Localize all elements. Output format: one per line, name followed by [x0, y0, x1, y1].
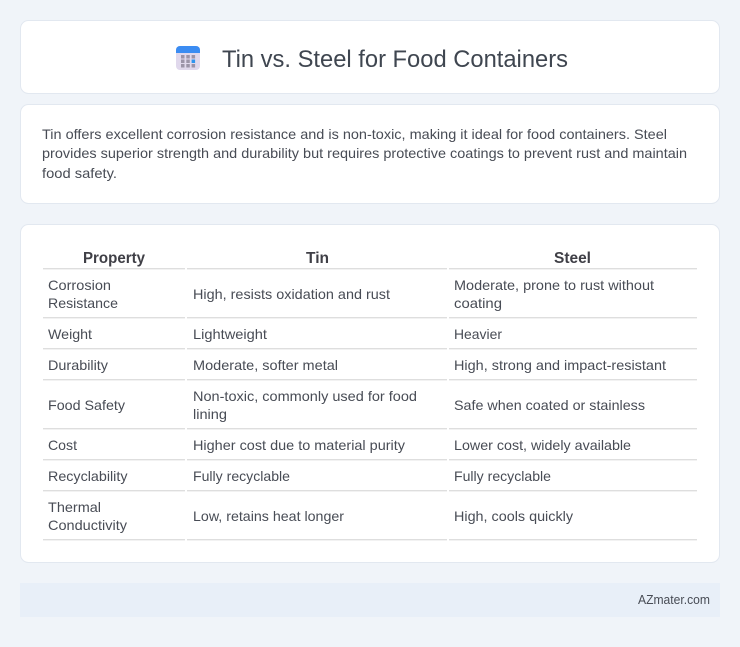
row: cost: Cost: [48, 437, 77, 453]
row: corrosion resistance: Moderate, prone to rust without: [454, 277, 654, 293]
row: recyclability: Fully recyclable: [193, 468, 290, 484]
row: durability: Moderate, softer metal: [193, 357, 338, 373]
text: summary paragraph: Tin offers excellent corrosion resistance and is non-toxic, making it ideal for food containers. Steel: [42, 126, 667, 142]
row: weight: Weight: [48, 326, 92, 342]
row: weight: [48, 326, 502, 342]
row: corrosion resistance: Corrosion: [48, 277, 111, 293]
row: weight: Heavier: [454, 326, 502, 342]
table header: Steel: [554, 250, 591, 267]
row: cost: Higher cost due to material purity: [193, 437, 405, 453]
row: corrosion resistance: [48, 277, 654, 311]
panel: summary: [20, 104, 720, 204]
row: thermal conductivity: Conductivity: [48, 517, 127, 533]
panel: title card: [20, 20, 720, 94]
panel: comparison table: [20, 224, 720, 562]
row: corrosion resistance: Resistance: [48, 295, 118, 311]
row: food safety: Non-toxic, commonly used for food: [193, 388, 417, 404]
row: weight: Lightweight: [193, 326, 267, 342]
row: durability: High, strong and impact-resistant: [454, 357, 666, 373]
row: recyclability: Recyclability: [48, 468, 128, 484]
icon: calendar: [176, 46, 200, 70]
table header: Tin: [306, 250, 329, 267]
row: thermal conductivity: [48, 499, 573, 533]
table rules: [43, 268, 697, 540]
row: food safety: Food Safety: [48, 397, 125, 413]
footer text: AZmater.com: [638, 593, 710, 607]
table header: Property: [83, 250, 145, 267]
row: recyclability: Fully recyclable: [454, 468, 551, 484]
row: corrosion resistance: High, resists oxidation and rust: [193, 286, 390, 302]
row: cost: [48, 437, 631, 453]
footer bar: [20, 583, 720, 617]
row: thermal conductivity: High, cools quickly: [454, 508, 573, 524]
row: cost: Lower cost, widely available: [454, 437, 631, 453]
row: corrosion resistance: coating: [454, 295, 502, 311]
row: thermal conductivity: Thermal: [48, 499, 101, 515]
row: food safety: Safe when coated or stainless: [454, 397, 645, 413]
row: food safety: lining: [193, 406, 227, 422]
text: summary paragraph: provides superior strength and durability but requires protective coatings to prevent rust and maintain: [42, 145, 687, 161]
row: food safety: [48, 388, 645, 422]
text: summary paragraph: food safety.: [42, 165, 117, 181]
table header: [83, 250, 591, 267]
text: summary paragraph: [42, 126, 687, 181]
row: thermal conductivity: Low, retains heat longer: [193, 508, 344, 524]
row: durability: [48, 357, 666, 373]
title: Tin vs. Steel for Food Containers: [222, 46, 568, 73]
row: recyclability: [48, 468, 551, 484]
row: durability: Durability: [48, 357, 108, 373]
